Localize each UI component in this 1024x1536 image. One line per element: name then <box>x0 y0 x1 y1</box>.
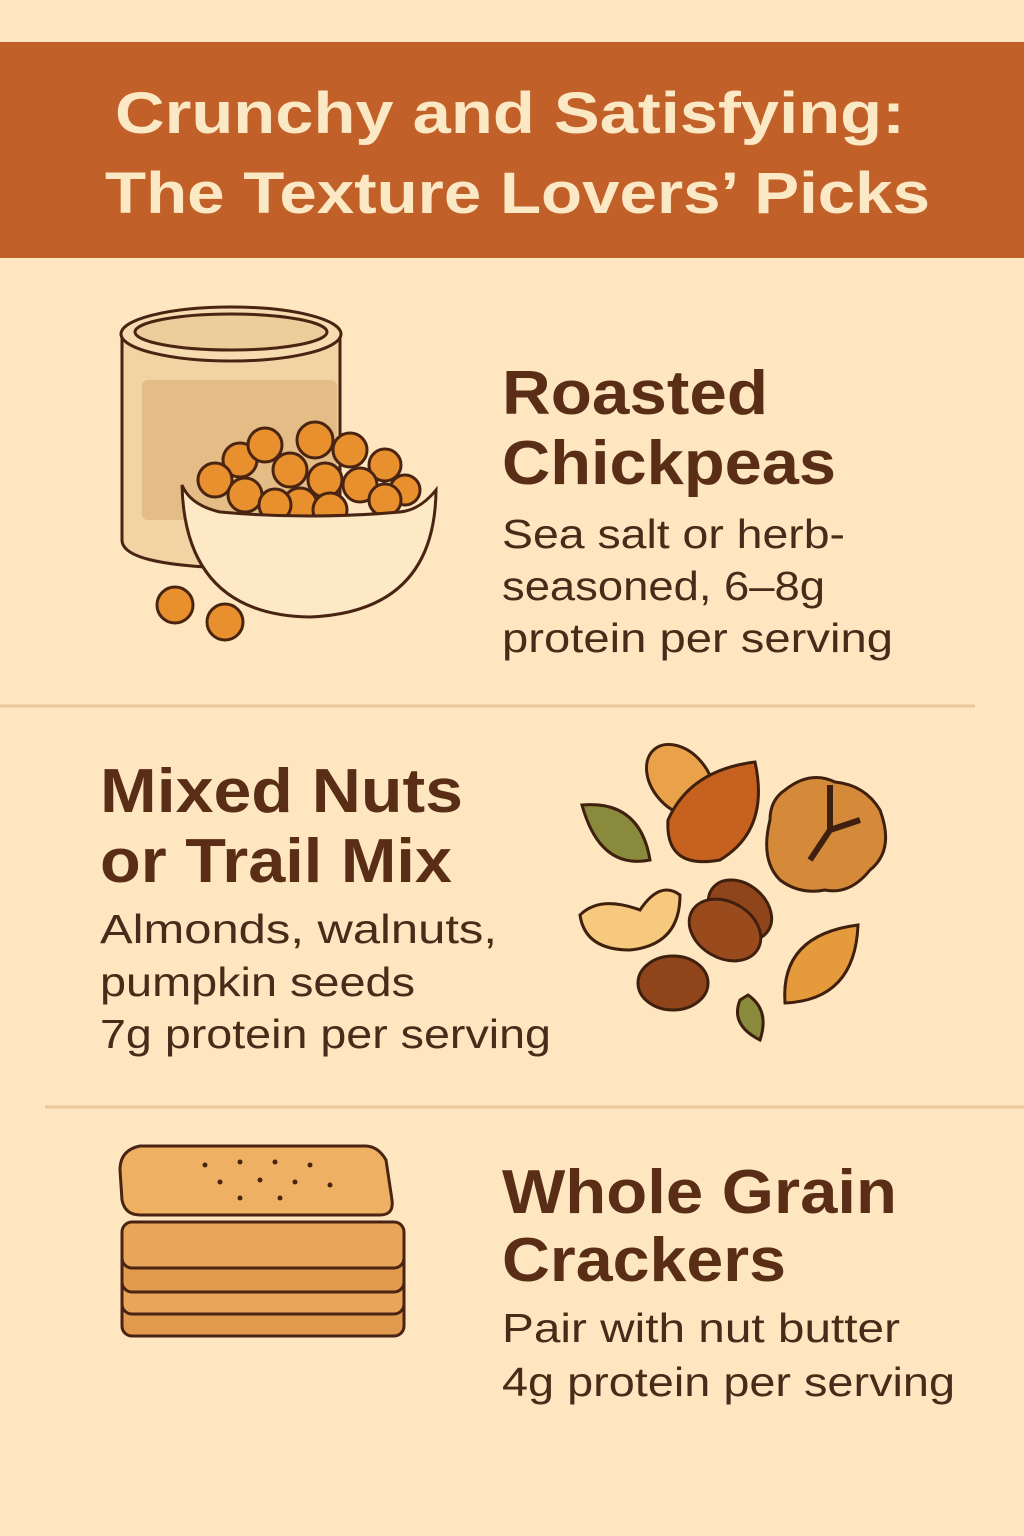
title: Crunchy and Satisfying: <box>115 81 905 146</box>
heading: Mixed Nuts <box>100 757 551 1057</box>
text: nuts description <box>100 906 551 1057</box>
icon: chickpea can and bowl <box>121 307 436 640</box>
text: crackers description: Pair with nut butter <box>502 1305 900 1351</box>
icon: crackers stack <box>120 1146 404 1336</box>
heading: Roasted Chickpeas: Chickpeas <box>502 429 836 498</box>
text: crackers description: 4g protein per serving <box>502 1359 955 1405</box>
text: nuts description: 7g protein per serving <box>100 1011 551 1057</box>
title: The Texture Lovers’ Picks <box>105 161 930 226</box>
heading: Whole Grain Crackers: Whole Grain <box>502 1158 897 1227</box>
heading: Mixed Nuts: Mixed Nuts <box>100 757 463 826</box>
heading: Roasted Chickpeas <box>502 359 893 661</box>
text: chickpeas description: seasoned, 6–8g <box>502 563 825 609</box>
heading: Whole Grain Crackers: Crackers <box>502 1226 786 1295</box>
text: chickpeas description: protein per serving <box>502 615 893 661</box>
title <box>105 81 930 226</box>
heading: Whole Grain Crackers <box>502 1158 955 1405</box>
text: crackers description <box>502 1305 955 1405</box>
heading: Roasted Chickpeas: Roasted <box>502 359 768 428</box>
header banner <box>0 42 1024 258</box>
text: nuts description: pumpkin seeds <box>100 959 415 1005</box>
icon: mixed nuts <box>580 731 886 1040</box>
heading: Mixed Nuts: or Trail Mix <box>100 827 453 896</box>
text: chickpeas description <box>502 511 893 661</box>
text: nuts description: Almonds, walnuts, <box>100 906 497 952</box>
text: chickpeas description: Sea salt or herb- <box>502 511 845 557</box>
